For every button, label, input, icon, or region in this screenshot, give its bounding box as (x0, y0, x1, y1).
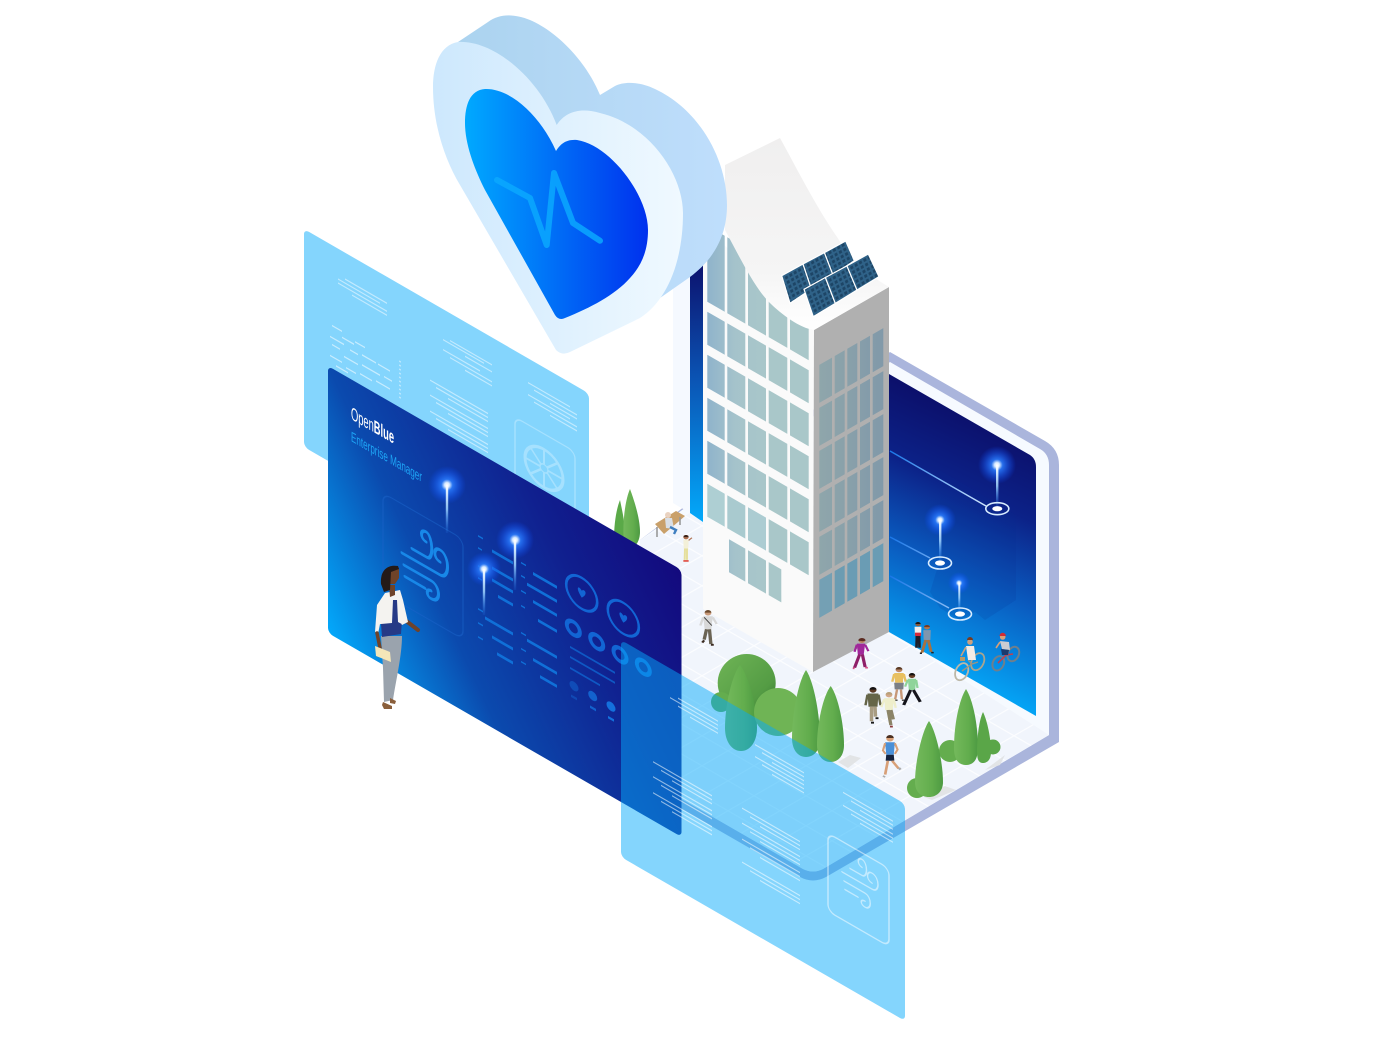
person: woman in magenta (853, 638, 868, 668)
person: cyclist man (990, 633, 1021, 672)
solar panels: back row (782, 241, 854, 303)
woman: neck and face (389, 567, 399, 597)
bench with seated person (655, 511, 685, 537)
panel: lower translucent screen (621, 640, 905, 1021)
back frame: periwinkle outer border (640, 352, 1059, 880)
wall beacon two (924, 504, 956, 569)
woman: jacket (375, 590, 408, 634)
heart: blue inner (465, 89, 648, 319)
back frame: white inner area (640, 362, 1049, 872)
wall circuit shading (930, 470, 1016, 620)
woman: hair (381, 566, 399, 592)
data table column two (521, 563, 557, 686)
tree cluster right (939, 689, 1000, 765)
lower screen text lines (653, 683, 893, 957)
person: couple man (920, 625, 934, 653)
woman: top (381, 600, 402, 637)
dashboard beacons (428, 466, 534, 615)
solar panels: front row (804, 254, 879, 317)
person: couple woman (915, 622, 921, 648)
tall cone tree (792, 670, 820, 757)
person: yellow shirt (892, 667, 906, 700)
left wall strip (673, 262, 703, 522)
heart icon (433, 15, 727, 354)
upper screen fan icon (515, 417, 575, 544)
person: olive jacket (866, 687, 880, 723)
wall beacon three (948, 572, 972, 620)
small blob (711, 692, 731, 712)
tree front (907, 721, 943, 798)
person: runner (883, 735, 901, 777)
large round bush (718, 654, 776, 712)
woman looking at dashboard (375, 566, 418, 709)
heart: front face (433, 42, 683, 354)
small woman by bench (683, 535, 692, 561)
heart: extruded back (458, 15, 727, 312)
wind icon (402, 518, 448, 608)
data table column one (478, 536, 513, 663)
wall connector lines (890, 451, 986, 608)
building: left facade (703, 225, 814, 672)
person: green shirt (904, 673, 920, 705)
woman: folder (375, 646, 391, 662)
heart: pulse line (497, 173, 600, 245)
shrubs behind panel edge (711, 654, 844, 762)
metric dots (570, 678, 616, 723)
metric lines (570, 647, 615, 694)
upper screen text lines (338, 273, 577, 504)
person: man with bag (700, 610, 717, 645)
wind icon box (383, 493, 463, 639)
wall beacon one (978, 446, 1016, 515)
building: curved roof (725, 138, 889, 330)
building: right facade windows (819, 328, 883, 618)
second round bush (754, 688, 802, 736)
woman: legs (381, 636, 402, 702)
upper screen dotted column (399, 361, 401, 401)
data wall: blue right wall (889, 374, 1036, 716)
ground shadows (838, 755, 1005, 800)
dashboard subheading: Enterprise Manager (351, 429, 422, 486)
person: pale shirt (881, 692, 896, 727)
woman: shoes (382, 698, 396, 709)
person: cyclist woman (952, 637, 987, 682)
woman: left hand (377, 633, 380, 648)
building: right facade (813, 287, 889, 672)
back trees (614, 489, 640, 548)
ring hearts (578, 587, 627, 625)
health rings (566, 569, 650, 679)
cone tree right (817, 686, 844, 762)
upper screen table (330, 324, 392, 398)
panel: OpenBlue dark dashboard (328, 366, 682, 837)
woman: right arm (405, 620, 418, 630)
building (703, 138, 889, 672)
lower screen wind icon (828, 833, 889, 946)
front conical bush (725, 665, 757, 751)
building: left facade windows (707, 226, 809, 618)
panel: upper light blue screen (304, 229, 589, 611)
floor with paving tiles (640, 513, 1049, 872)
dashboard heading: OpenBlue (351, 403, 394, 449)
